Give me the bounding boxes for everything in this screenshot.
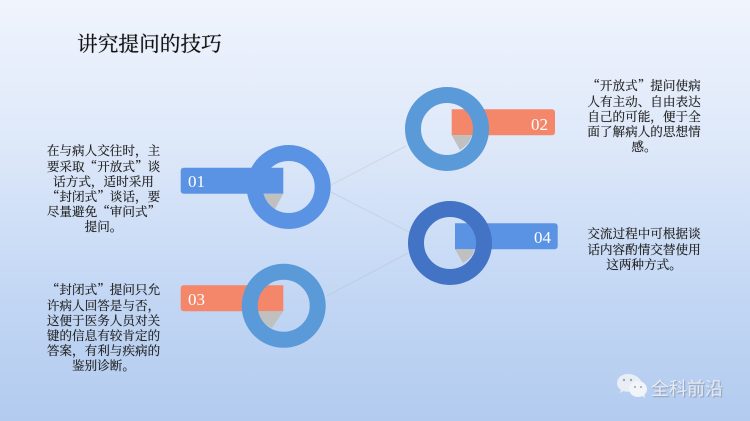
node 02: [413, 95, 555, 163]
text block 01: 话方式，适时采用: [53, 171, 154, 190]
node 01: 01: [188, 172, 205, 191]
node 04: [416, 209, 558, 277]
node 02: 02: [531, 115, 548, 134]
text block 03: 答案，有利与疾病的: [47, 340, 160, 359]
text block 03: “封闭式”提问只允: [47, 279, 160, 298]
text block 03: [47, 279, 160, 374]
text block 01: 尽量避免“审问式”: [47, 201, 160, 220]
text block 04: 话内容酌情交替使用: [587, 239, 701, 258]
text block 01: [47, 140, 160, 235]
text block 01: 要采取“开放式”谈: [47, 156, 160, 175]
icon: wechat logo: [617, 374, 647, 398]
text block 01: 提问。: [85, 216, 122, 235]
text block 02: 人有主动、自由表达: [587, 91, 701, 110]
text block 02: “开放式”提问使病: [587, 75, 701, 94]
text block 04: 交流过程中可根据谈: [587, 223, 701, 242]
text block 01: 在与病人交往时，主: [47, 140, 160, 159]
connector lines: [327, 146, 409, 296]
text block 03: 这便于医务人员对关: [47, 310, 160, 329]
watermark text: 全科前沿: [651, 379, 723, 399]
node 03: [181, 272, 318, 340]
text block 04: 这两种方式。: [606, 254, 682, 273]
node 04: 04: [534, 228, 552, 247]
text block 02: [587, 75, 701, 155]
text block 04: [587, 223, 701, 273]
node 03: 03: [188, 290, 205, 309]
text block 03: 键的信息有较肯定的: [47, 325, 160, 344]
title: 讲究提问的技巧: [77, 27, 222, 57]
node 01: [181, 153, 323, 221]
text block 02: 自己的可能，便于全: [587, 106, 701, 125]
text block 03: 许病人回答是与否，: [47, 295, 160, 314]
text block 02: 面了解病人的思想情: [587, 121, 701, 140]
text block 02: 感。: [631, 136, 657, 155]
text block 03: 鉴别诊断。: [72, 355, 135, 374]
text block 01: “封闭式”谈话，要: [47, 186, 160, 205]
